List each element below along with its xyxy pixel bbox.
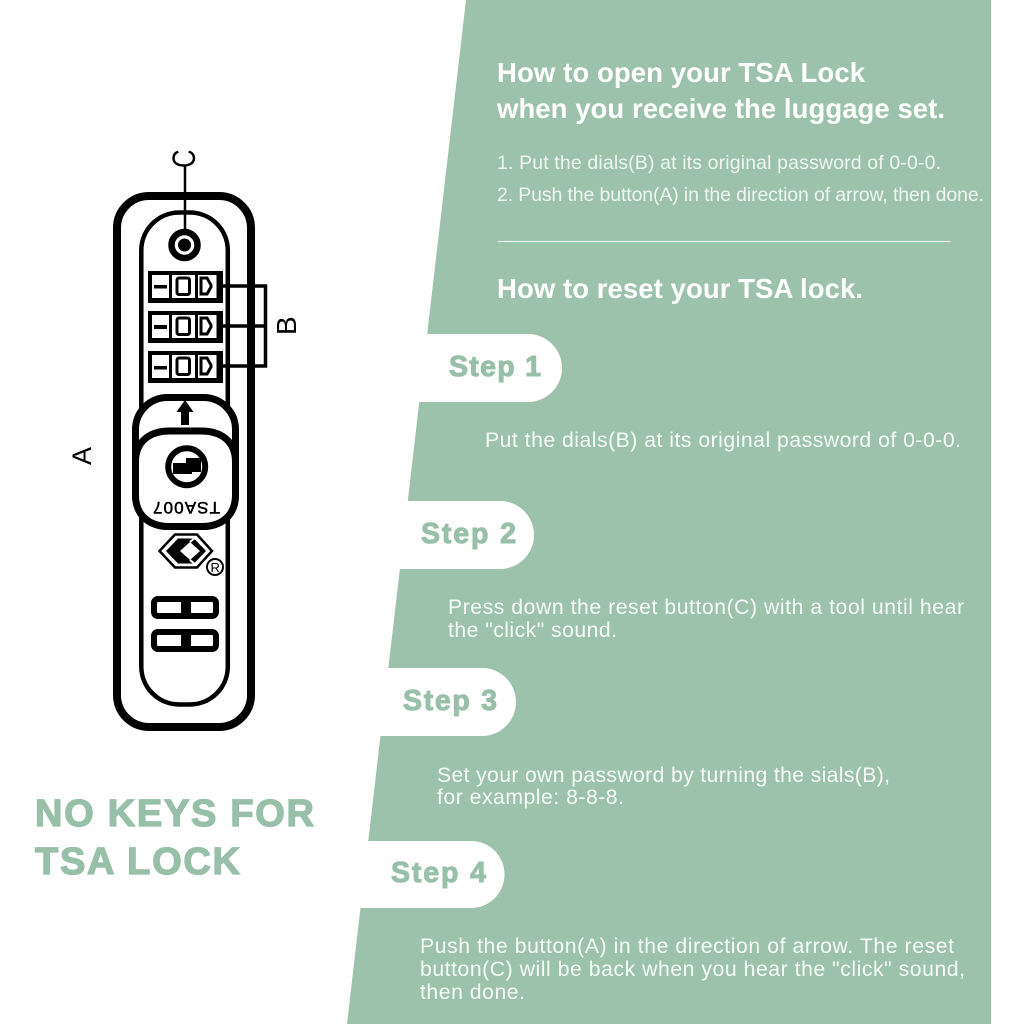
text block: opening instructions: 2. Push the button(A) in the direction of arrow, then done.	[497, 184, 984, 206]
heading: how to open: How to open your TSA Lock	[497, 57, 866, 88]
heading: how to reset: How to reset your TSA lock.	[497, 273, 863, 304]
text block: opening instructions	[497, 152, 984, 206]
label C with leader line: C	[167, 149, 203, 168]
text block: opening instructions: 1. Put the dials(B) at its original password of 0-0-0.	[497, 152, 941, 174]
step 4 text: button(C) will be back when you hear the "click" sound,	[420, 958, 965, 981]
button A upper slider	[136, 398, 236, 526]
step 2 pill	[390, 501, 534, 569]
title: no keys for TSA lock: NO KEYS FOR	[35, 793, 314, 835]
step 3 pill	[370, 668, 516, 736]
grip slots	[154, 597, 216, 651]
label C with leader line	[167, 149, 203, 232]
lock inner plate	[141, 212, 228, 704]
lock outer body	[117, 196, 251, 727]
registered mark	[207, 559, 223, 575]
heading: how to open: when you receive the luggage set.	[496, 93, 945, 124]
step 2 pill: Step 2	[421, 518, 516, 550]
reset button C	[172, 232, 198, 258]
dials B	[148, 271, 223, 383]
step 4 pill	[350, 841, 504, 908]
panel: green instructions background	[347, 0, 991, 1024]
step 4 pill: Step 4	[391, 857, 486, 889]
upside-down TSA007 text: TSA007	[153, 498, 220, 517]
step 2 text: Press down the reset button(C) with a tool until hear	[448, 596, 964, 619]
dial 1	[148, 271, 223, 303]
label B: B	[271, 316, 302, 335]
arrow	[176, 400, 194, 425]
bracket for label B	[223, 286, 266, 366]
step 1 pill: Step 1	[449, 351, 541, 383]
button A front	[136, 431, 236, 526]
dial 2	[148, 311, 223, 343]
registered mark: R	[210, 560, 220, 575]
step 4 text	[420, 935, 965, 1004]
title: no keys for TSA lock: TSA LOCK	[35, 841, 241, 883]
step 3 text	[437, 764, 890, 809]
dial 3	[148, 351, 223, 383]
step 3 pill: Step 3	[403, 685, 497, 717]
step 1 pill	[410, 334, 562, 402]
step 2 text	[448, 596, 964, 642]
step 2 text: the "click" sound.	[448, 619, 617, 642]
heading: how to open	[496, 57, 945, 124]
lock diagram	[117, 149, 302, 727]
step 4 text: then done.	[420, 981, 525, 1004]
step 1 text: Put the dials(B) at its original password of 0-0-0.	[485, 429, 961, 452]
title: no keys for TSA lock	[35, 793, 314, 883]
step 3 text: Set your own password by turning the sials(B),	[437, 764, 890, 787]
label A: A	[67, 447, 97, 465]
step 3 text: for example: 8-8-8.	[437, 786, 624, 809]
keyhole icon	[168, 448, 205, 485]
brand logo	[160, 534, 212, 568]
step 4 text: Push the button(A) in the direction of arrow. The reset	[420, 935, 954, 958]
